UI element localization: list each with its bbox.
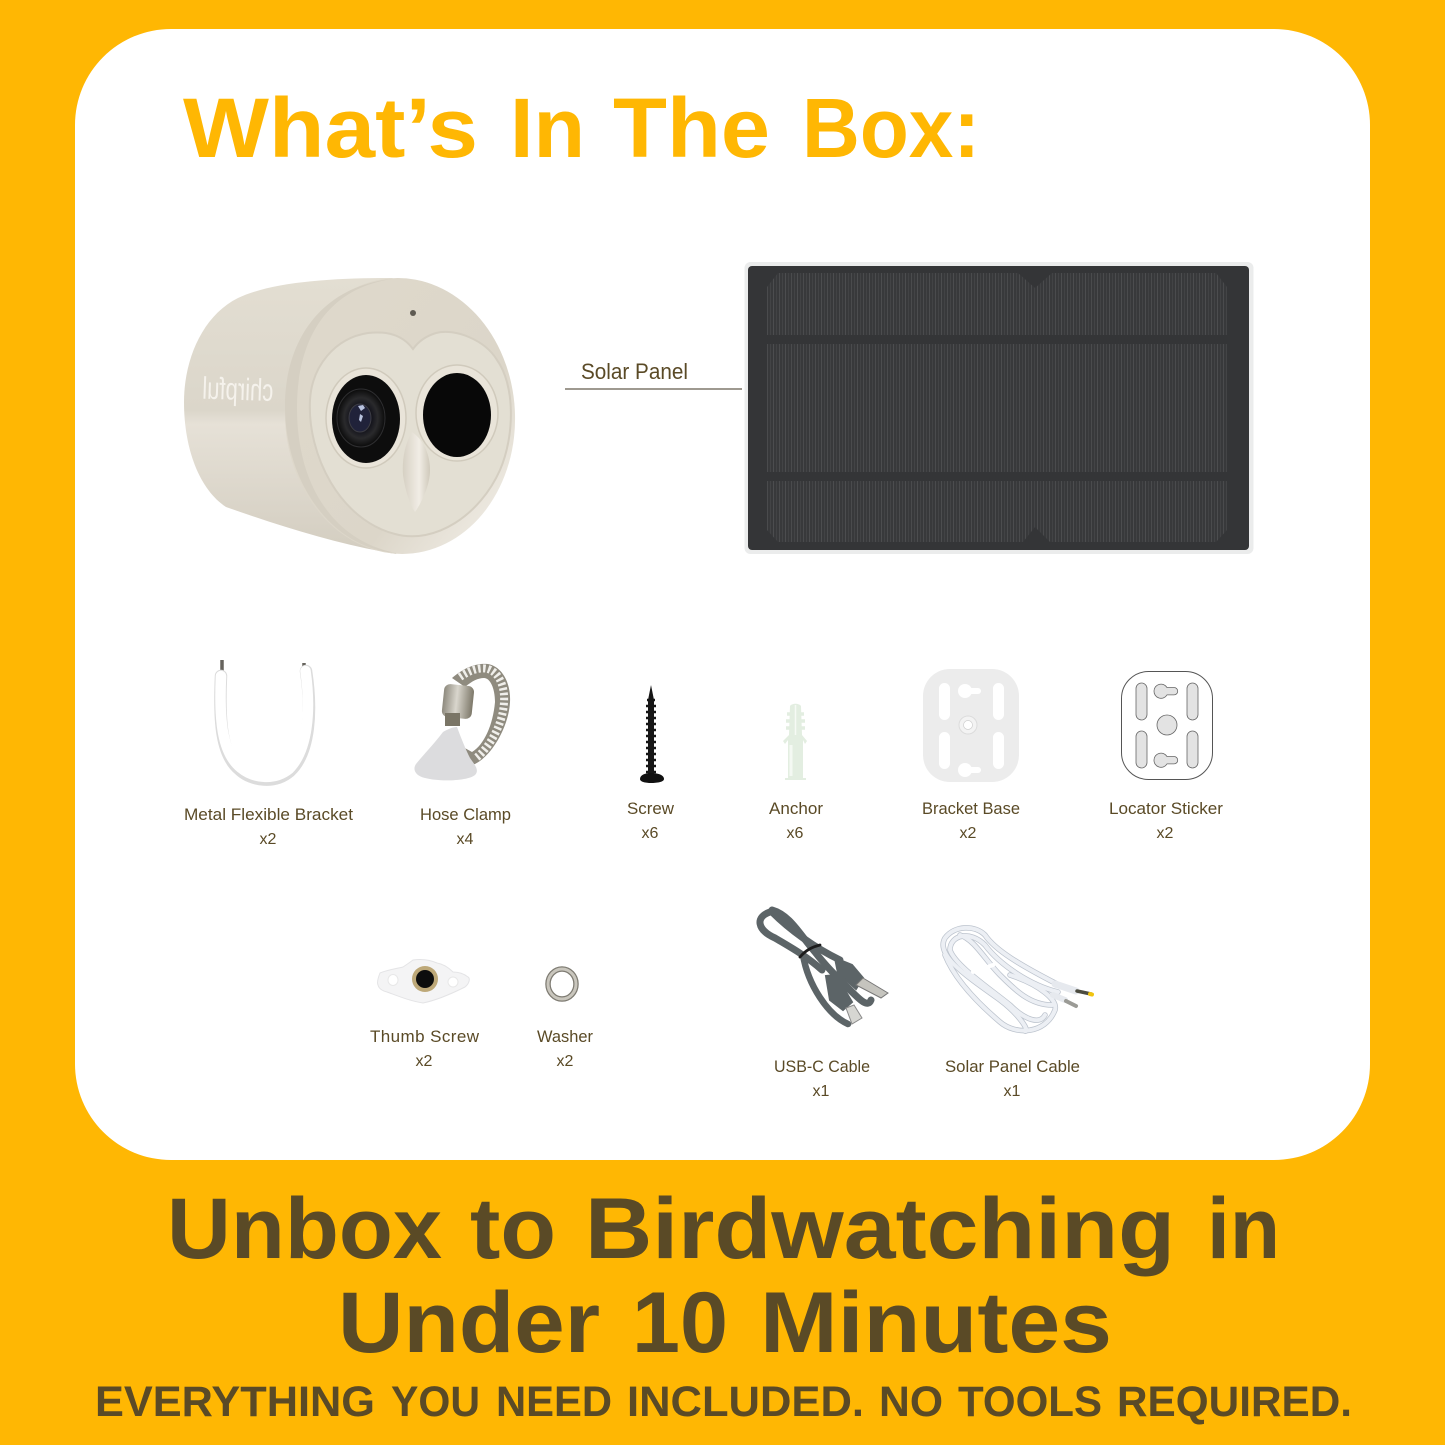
item: metal flexible bracket [184, 660, 353, 848]
label [370, 1027, 480, 1070]
icon: locator sticker template [1122, 672, 1212, 780]
label [774, 1057, 870, 1100]
icon: owl facial disc [310, 332, 511, 536]
tagline: TOOLS [958, 1378, 1102, 1426]
label [945, 1057, 1080, 1100]
headline: Under [338, 1275, 600, 1371]
label: x2 [416, 1053, 433, 1070]
icon: camera lens eye [326, 368, 406, 468]
headline: 10 [632, 1275, 728, 1371]
icon: coiled USB-C cable [760, 910, 888, 1024]
item: screw [627, 685, 675, 842]
label: Locator Sticker [1109, 799, 1223, 818]
brand wordmark mirrored: chirpful [202, 371, 274, 408]
headline: Birdwatching [585, 1181, 1175, 1277]
label [420, 805, 511, 848]
label: Anchor [769, 799, 823, 818]
solar panel [744, 262, 1254, 554]
title [183, 81, 980, 175]
icon: bracket base plate [923, 669, 1019, 782]
title: What’s [183, 81, 478, 175]
label: Screw [627, 799, 675, 818]
label: Hose Clamp [420, 805, 511, 824]
label [537, 1027, 593, 1070]
item: USB-C cable [760, 910, 888, 1100]
item: thumb screw [370, 959, 480, 1070]
label: Bracket Base [922, 799, 1020, 818]
tagline: YOU [391, 1378, 480, 1426]
label: x2 [1157, 825, 1174, 842]
icon: wall anchor [783, 704, 807, 780]
label: x2 [960, 825, 977, 842]
label: Washer [537, 1027, 593, 1046]
label: x1 [813, 1083, 830, 1100]
item: locator sticker [1109, 672, 1223, 842]
title: Box: [802, 81, 980, 175]
label: x1 [1004, 1083, 1021, 1100]
icon: thumb screw [378, 959, 469, 1003]
title: In [510, 81, 585, 175]
label [1109, 799, 1223, 842]
label: x6 [642, 825, 659, 842]
tagline: NEED [496, 1378, 612, 1426]
headline: in [1207, 1181, 1280, 1277]
icon: beak [403, 432, 430, 512]
label [627, 799, 675, 842]
tagline: REQUIRED. [1117, 1378, 1352, 1426]
item: anchor [769, 704, 823, 842]
label: USB-C Cable [774, 1057, 870, 1076]
tagline [95, 1378, 1352, 1426]
label: x2 [260, 831, 277, 848]
label: x6 [787, 825, 804, 842]
icon: spring washer [548, 969, 576, 999]
item: solar panel cable [943, 928, 1092, 1100]
item: bracket base [922, 669, 1020, 842]
label: x2 [557, 1053, 574, 1070]
icon: black screw [640, 685, 664, 783]
tagline: INCLUDED. [627, 1378, 864, 1426]
headline: Minutes [760, 1275, 1112, 1371]
label: x4 [457, 831, 474, 848]
icon: U-shaped bracket [220, 660, 309, 780]
label: Solar Panel Cable [945, 1057, 1080, 1076]
title: The [613, 81, 770, 175]
headline [167, 1181, 1280, 1371]
label [769, 799, 823, 842]
headline: Unbox [167, 1181, 442, 1277]
label [184, 805, 353, 848]
callout: solar panel label: Solar Panel [581, 359, 688, 384]
icon: sensor eye [416, 365, 498, 461]
headline: to [470, 1181, 556, 1277]
icon: microphone hole [410, 310, 416, 316]
item: hose clamp [414, 664, 511, 848]
camera: owl-shaped bird camera [184, 272, 522, 560]
icon: coiled white cable [943, 928, 1092, 1031]
tagline: NO [879, 1378, 943, 1426]
icon: clamp with thumb key [414, 664, 510, 780]
label: Thumb Screw [370, 1027, 480, 1046]
panel: white card [75, 29, 1370, 1160]
label [922, 799, 1020, 842]
label: Metal Flexible Bracket [184, 805, 353, 824]
tagline: EVERYTHING [95, 1378, 375, 1426]
item: washer [537, 969, 593, 1070]
